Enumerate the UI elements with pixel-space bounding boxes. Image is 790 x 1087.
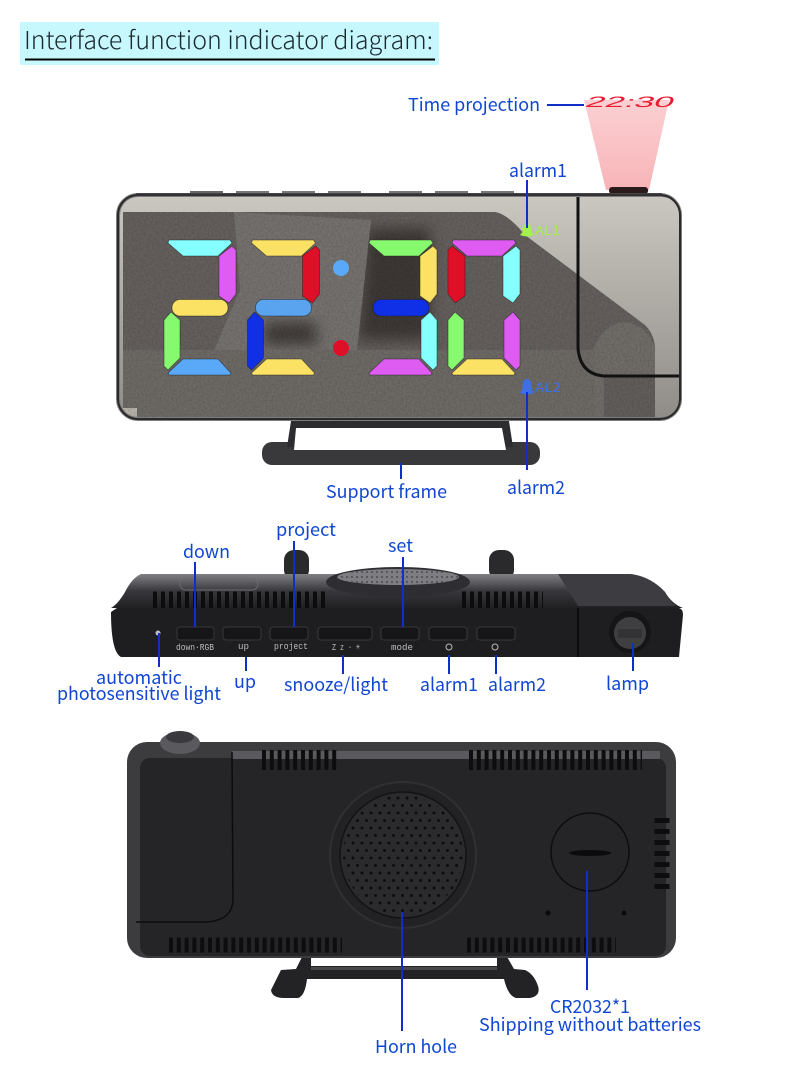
- label: horn hole: Horn hole: [375, 1033, 457, 1059]
- LED digit 2: [164, 240, 236, 375]
- label: project: project: [276, 516, 336, 542]
- label: alarm1: alarm1: [509, 157, 567, 183]
- label: time projection: Time projection: [408, 91, 540, 117]
- button captions: mode: [391, 643, 413, 653]
- label: set: set: [388, 532, 413, 558]
- LED digit 3: [369, 240, 437, 375]
- label: down: [183, 538, 230, 627]
- top view of clock with buttons: [111, 550, 683, 657]
- label: automatic photosensitive light: [57, 633, 221, 706]
- projector compartment divider: [578, 197, 680, 376]
- label: alarm2: [507, 392, 565, 500]
- label: alarm2: alarm2: [507, 474, 565, 500]
- projection beam with projected time: [582, 95, 678, 190]
- case: [127, 742, 676, 958]
- LED digit 2 second: [248, 240, 320, 375]
- label: set: [388, 532, 413, 627]
- LED digit 0: [448, 240, 520, 375]
- label: up: up: [234, 668, 256, 694]
- AL2 indicator: [520, 377, 561, 396]
- label: lamp: lamp: [606, 670, 649, 696]
- button row: [177, 627, 515, 640]
- mirror screen with sofa photo: [116, 193, 682, 421]
- button captions: Z z · ☀: [332, 643, 360, 653]
- label: project: [276, 516, 336, 627]
- button captions: up: [238, 642, 249, 652]
- clock case: [116, 193, 682, 421]
- label: alarm1: [509, 157, 567, 228]
- front view of clock with LED display: [116, 187, 682, 465]
- label: battery note: Shipping without batteries: [479, 1011, 701, 1037]
- label: battery note: [479, 871, 701, 1037]
- sensor: [156, 630, 160, 636]
- top buttons and projector knob: [190, 187, 648, 194]
- vents: [169, 760, 662, 945]
- label: automatic photosensitive light: automatic: [96, 664, 182, 690]
- stand: [271, 955, 539, 998]
- rear posts: [284, 550, 514, 580]
- button captions: [176, 642, 498, 653]
- label: alarm2 button: [488, 655, 546, 697]
- speaker horn: [330, 782, 476, 928]
- label: battery note: CR2032*1: [550, 993, 630, 1019]
- projector knob: [160, 731, 200, 754]
- screw holes: [546, 910, 626, 916]
- label: automatic photosensitive light: photosensitive light: [57, 680, 221, 706]
- battery cover: [551, 813, 629, 891]
- case top: [111, 574, 683, 608]
- LED colon: [333, 260, 349, 356]
- projection beam with projected time: 22:30: [582, 95, 678, 111]
- AL1 indicator: [520, 220, 560, 239]
- lamp lens: [609, 611, 651, 653]
- button captions: project: [274, 642, 308, 652]
- AL2 indicator: AL2: [535, 377, 561, 396]
- vents: [153, 592, 543, 608]
- label: down: down: [183, 538, 230, 564]
- stand: [262, 421, 540, 465]
- label: support frame: Support frame: [326, 478, 447, 504]
- projector panel outline: [136, 752, 233, 922]
- back view of clock: [127, 731, 676, 998]
- top speaker: [326, 567, 470, 597]
- label: alarm1 button: [420, 655, 478, 697]
- label: alarm2 button: alarm2: [488, 671, 546, 697]
- title banner: Interface function indicator diagram:: [24, 21, 433, 57]
- label: alarm1 button: alarm1: [420, 671, 478, 697]
- label: snooze/light: [284, 655, 388, 697]
- label: lamp: [606, 643, 649, 696]
- AL1 indicator: AL1: [535, 220, 560, 239]
- label: snooze/light: snooze/light: [284, 671, 388, 697]
- button captions: down·RGB: [176, 643, 215, 653]
- label: support frame: [326, 463, 447, 504]
- front face: [111, 608, 683, 657]
